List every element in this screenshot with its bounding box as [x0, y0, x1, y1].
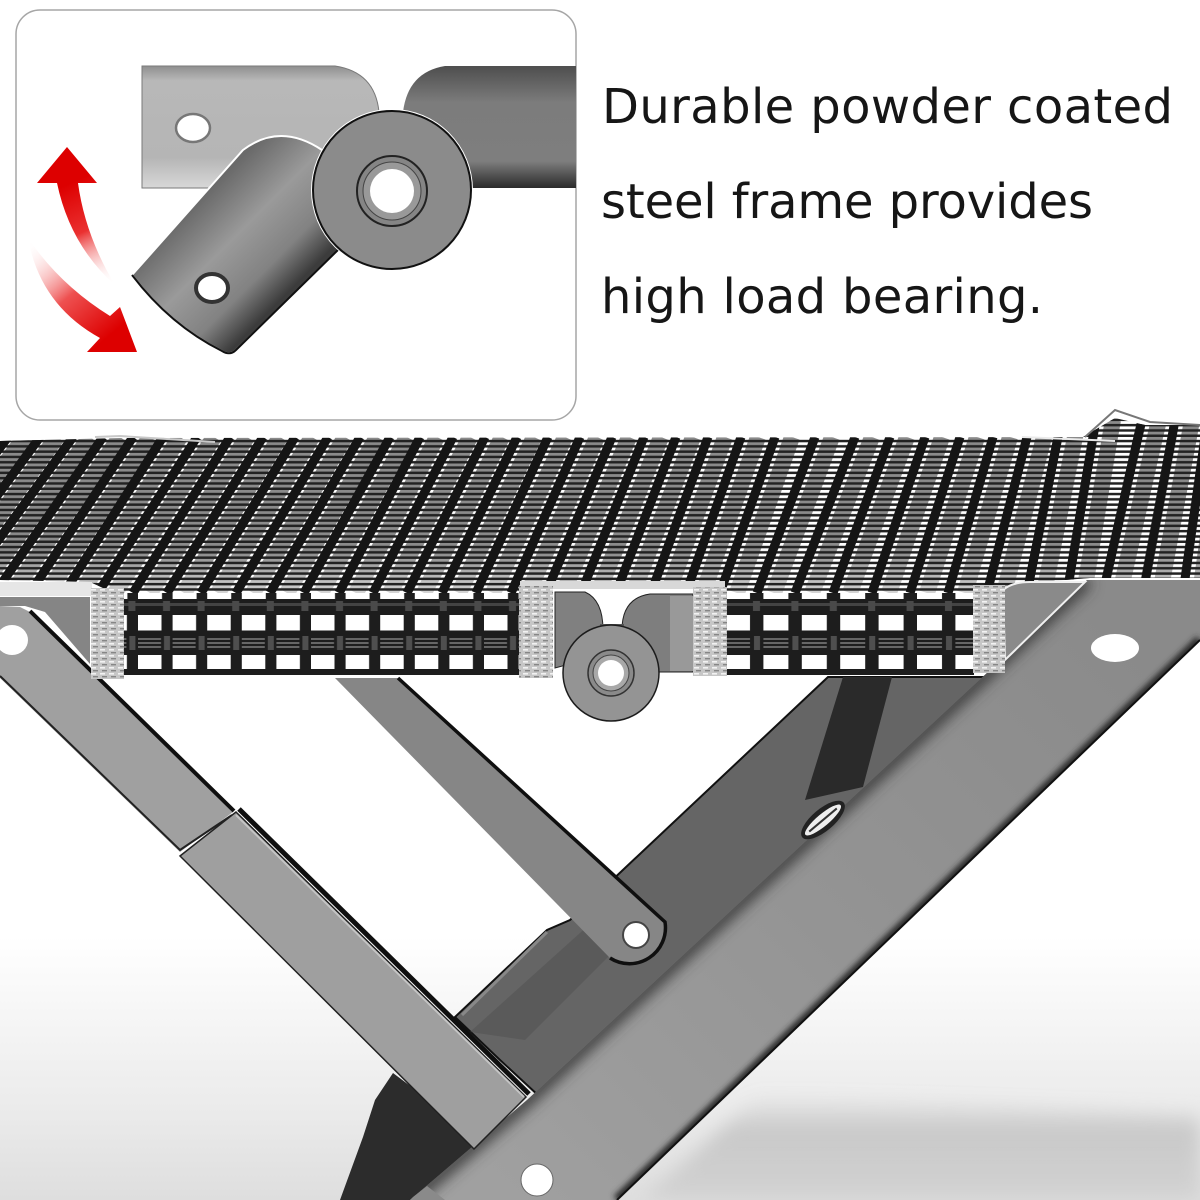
- heading text: durable frame: steel frame provides: [601, 174, 1093, 230]
- dark strap: [805, 677, 892, 800]
- rear dark plate behind rail: [455, 677, 985, 1097]
- disc hole: [370, 169, 414, 213]
- left bar bolt hole: [0, 625, 28, 655]
- mesh side band right: [726, 593, 974, 675]
- heading text: durable frame: Durable powder coated: [602, 79, 1173, 135]
- bottom dark joint: [340, 1073, 482, 1200]
- center hinge bracket: [520, 581, 725, 672]
- light tube: [142, 66, 379, 188]
- folding hinge pin: [795, 794, 851, 846]
- mesh side band left: [122, 593, 520, 675]
- velcro strap 1: [91, 588, 124, 679]
- left corner bracket: [0, 582, 92, 664]
- swing tube hole: [196, 274, 228, 302]
- light tube hole: [176, 114, 210, 142]
- leg sleeve: [180, 812, 526, 1149]
- rail hole upper: [1091, 634, 1139, 662]
- disc hub: [357, 156, 427, 226]
- velcro strap 2: [519, 586, 553, 678]
- mesh deck: [0, 410, 1200, 600]
- velcro strap 3: [693, 587, 727, 676]
- pivot hole: [623, 922, 649, 948]
- main side rail: [410, 580, 1200, 1200]
- heading text: durable frame: [601, 79, 1173, 325]
- hinge disc: [563, 625, 659, 721]
- rail hole lower: [521, 1164, 553, 1196]
- left leg bar: [0, 606, 529, 1149]
- middle cross bar: [335, 678, 665, 964]
- swing tube: [132, 136, 350, 353]
- panel: joint detail inset: [16, 10, 576, 420]
- dark tube: [403, 66, 576, 188]
- arrow: down: [28, 238, 137, 352]
- heading text: durable frame: high load bearing.: [601, 269, 1043, 325]
- velcro strap 4: [973, 585, 1005, 673]
- grey bottom corner: [410, 1186, 445, 1200]
- pivot disc: [311, 110, 473, 251]
- arrow: up: [37, 147, 115, 285]
- mesh top edge highlights: [95, 410, 1200, 442]
- right corner bracket: [1003, 582, 1085, 660]
